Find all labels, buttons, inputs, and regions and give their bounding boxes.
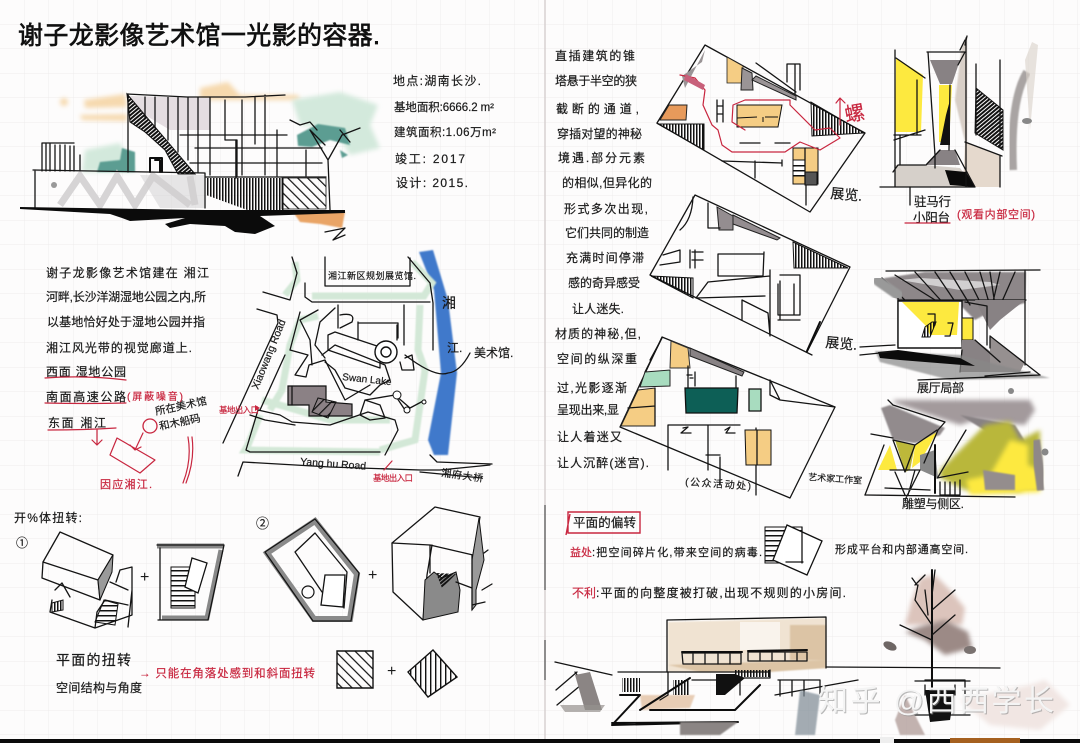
project facts — [393, 73, 496, 190]
plan 2 — [650, 195, 858, 355]
plan 3 label: 艺术家工作室 — [808, 471, 862, 486]
watermark: 知乎 @西西学长 — [819, 686, 1055, 719]
public art note: (公众活动处) — [685, 476, 751, 493]
red orientation diagram: 因应湘江. — [100, 477, 152, 491]
right page essay: 充满时间停滞 — [566, 250, 644, 265]
project facts: 设计: 2015. — [396, 176, 468, 190]
plan twist heading: 平面的偏转 — [573, 515, 636, 530]
sketch: small balcony — [880, 36, 1038, 205]
site description text: 谢子龙影像艺术馆建在 湘江 — [46, 265, 209, 280]
right page essay: 过,光影逐渐 — [557, 381, 627, 395]
platform note: 形成平台和内部通高空间. — [835, 542, 968, 556]
sculpture label: 雕塑与侧区. — [902, 496, 964, 511]
orange ground — [293, 212, 345, 228]
tree foliage — [905, 575, 965, 625]
twist diagram — [765, 525, 822, 575]
number one: ① — [16, 536, 28, 550]
site description text: 湘江风光带的视觉廊道上. — [46, 340, 192, 355]
curtain wall grid — [127, 94, 322, 178]
underlines — [45, 377, 126, 430]
tree branches — [290, 120, 360, 210]
green park wash — [245, 262, 432, 452]
north building label — [325, 257, 416, 286]
right page essay — [555, 48, 652, 470]
plan 3 — [620, 337, 862, 498]
right page essay: 让人沉醉(迷宫). — [557, 455, 649, 470]
watermark: 知乎 @西西学长 — [818, 685, 1054, 718]
hatched base — [206, 178, 285, 211]
museum leader and label — [405, 353, 470, 374]
hatched diamond — [408, 650, 457, 697]
project facts: 基地面积:6666.2 m² — [394, 101, 494, 114]
wall outline — [33, 170, 205, 208]
red entrance labels: 基地出入口 — [219, 405, 259, 415]
plan 2 label: 展览. — [825, 334, 858, 353]
balcony label: 驻马行 — [914, 194, 951, 209]
red arrow — [836, 98, 845, 125]
red balcony note: (观看内部空间) — [957, 207, 1035, 221]
balcony label: 小阳台 — [913, 210, 950, 225]
right page essay: 感的奇异感受 — [568, 275, 640, 290]
teal foliage — [97, 124, 350, 172]
right page essay: 形式多次出现, — [564, 202, 648, 216]
site description text: 西面 湿地公园 — [46, 364, 126, 379]
massing model 2 — [392, 507, 492, 620]
red orientation diagram — [92, 394, 208, 491]
green tree wash — [82, 92, 380, 172]
ground shadow — [20, 207, 345, 234]
sketch: hall detail — [860, 270, 1050, 380]
right page essay: 材质的神秘,但, — [555, 326, 641, 341]
plan frame 1 — [157, 545, 224, 620]
roads — [223, 257, 433, 443]
road labels: Xiaowang Road — [250, 318, 289, 391]
sketch: museum exterior — [20, 82, 380, 240]
site map: 湘府大桥 — [441, 466, 484, 485]
form twist heading: 开%体扭转: — [14, 510, 82, 525]
site map: 江. — [447, 341, 462, 355]
drawback line: :平面的向整度被打破,出现不规则的小房间. — [596, 585, 846, 600]
title: 谢子龙影像艺术馆一光影的容器. — [18, 22, 380, 50]
right page essay: 境遇.部分元素 — [558, 150, 645, 165]
plus sign: + — [368, 567, 377, 584]
site description text: 河畔,长沙洋湖湿地公园之内,所 — [46, 289, 206, 304]
small doorway — [150, 158, 162, 172]
sketch: elevation with tree — [555, 570, 1070, 735]
north building label: 湘江新区规划展览馆. — [328, 270, 416, 281]
hatched square — [337, 651, 373, 688]
site map — [219, 250, 513, 485]
number two: ② — [256, 516, 269, 531]
red orientation diagram: 和木船码 — [158, 411, 202, 433]
right page essay: 它们共同的制造 — [565, 225, 649, 240]
site map: 美术馆. — [474, 345, 513, 360]
site description text: 东面 湘江 — [48, 415, 106, 430]
sketch: sculpture zone — [865, 388, 1048, 500]
right page essay: 空间的纵深重 — [557, 351, 637, 366]
benefit line: :把空间碎片化,带来空间的病毒. — [592, 545, 762, 559]
plan twist heading — [566, 512, 640, 535]
red note: 螺 — [843, 101, 867, 127]
plan 1 label: 展览. — [830, 185, 863, 204]
red arrow note: → 只能在角落处感到和斜面扭转 — [139, 666, 316, 680]
site map: 基地出入口 — [373, 473, 413, 483]
site map: Yang hu Road — [300, 456, 367, 473]
river — [419, 250, 457, 455]
right page essay: 截断的通道, — [556, 101, 639, 116]
red circulation line — [680, 75, 840, 152]
fence — [42, 143, 80, 171]
red annotation: noise shielding: (屏蔽噪音) — [127, 390, 183, 403]
river labels: 湘 — [442, 295, 456, 311]
project facts: 竣工: 2017 — [395, 151, 465, 166]
lake label: Swan Lake — [342, 372, 392, 388]
drawback line: 不利 — [572, 586, 596, 600]
bottom book edge — [0, 737, 1080, 743]
site description text: 以基地恰好处于湿地公园并指 — [47, 314, 205, 329]
chevron wall — [60, 176, 195, 205]
right page essay: 塔悬于半空的狭 — [555, 73, 637, 88]
benefit line: 益处 — [570, 545, 592, 559]
twist caption: 空间结构与角度 — [56, 680, 142, 695]
twist caption — [56, 652, 142, 695]
plus sign: + — [140, 569, 149, 586]
peach sky wash — [60, 82, 300, 121]
plan 1 — [657, 45, 867, 212]
winding paths — [250, 395, 425, 455]
balcony label — [913, 194, 951, 225]
balcony underline — [905, 222, 950, 224]
page spine — [544, 0, 546, 740]
right page essay: 让人着迷又 — [557, 429, 622, 444]
project facts: 建筑面积:1.06万m² — [394, 125, 496, 139]
massing model 1 — [42, 532, 132, 628]
hall label: 展厅局部 — [917, 380, 964, 395]
lake shore — [322, 345, 390, 395]
right page essay: 的相似,但异化的 — [562, 175, 652, 190]
twist caption: 平面的扭转 — [56, 652, 131, 668]
plan frame 2 pentagon — [265, 519, 359, 621]
mauve glass — [130, 96, 210, 130]
right page essay: 让人迷失. — [572, 301, 624, 316]
right page essay: 直插建筑的锥 — [555, 48, 635, 63]
right page essay: 穿插对望的神秘 — [557, 126, 642, 141]
studied building block — [288, 386, 352, 416]
site description text: 南面高速公路 — [46, 389, 126, 404]
site description text — [46, 265, 209, 430]
plus sign: + — [387, 663, 396, 680]
museum block — [328, 332, 380, 368]
red orientation diagram: 所在美术馆 — [154, 394, 208, 418]
project facts: 地点:湖南长沙. — [393, 73, 481, 88]
right page essay: 呈现出来,显 — [557, 403, 619, 417]
dark diagonal wedge — [127, 94, 195, 174]
